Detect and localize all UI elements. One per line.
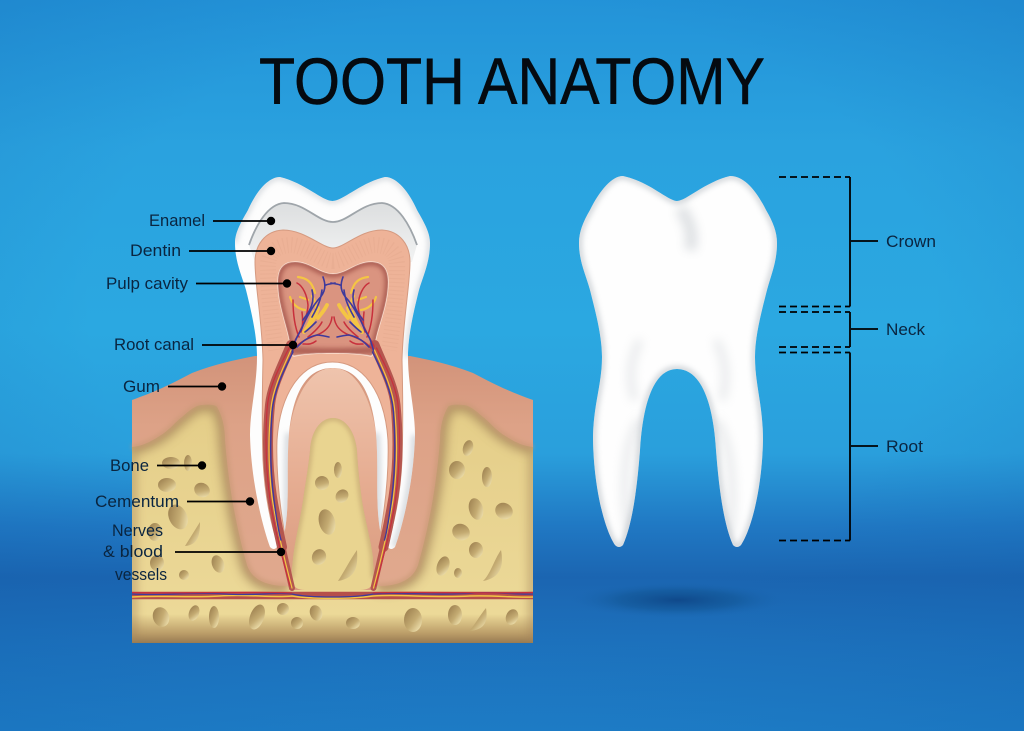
zone bracket: crown: [779, 177, 936, 306]
label: Root canal: Root canal: [114, 335, 194, 354]
zone bracket: root: [779, 352, 923, 540]
zone bracket: root: Root: [886, 437, 923, 456]
title: TOOTH ANATOMY: [259, 44, 765, 118]
label: Gum: [123, 377, 226, 396]
bone block: [132, 402, 533, 643]
floor shadow: [570, 582, 786, 618]
label: Nerves & blood vessels: & blood: [103, 542, 163, 561]
zone bracket: neck: [779, 312, 926, 347]
gum arch: [284, 368, 381, 590]
label: Cementum: Cementum: [95, 492, 179, 511]
whole tooth illustration: [579, 176, 777, 547]
blood vessel band: [132, 592, 533, 598]
label: Pulp cavity: [106, 274, 291, 293]
panel: tooth cross-section diagram: [95, 177, 533, 643]
label: Nerves & blood vessels: Nerves: [112, 521, 163, 540]
label: Bone: [110, 456, 206, 475]
tooth: white enamel and cementum: [235, 177, 430, 549]
pulp cavity: [278, 262, 388, 356]
label: Dentin: Dentin: [130, 241, 181, 260]
bone pores: [148, 439, 520, 632]
label: Cementum: [95, 492, 254, 511]
enamel inner layer: [249, 203, 417, 262]
label: Root canal: [114, 335, 297, 354]
labels and leaders: [95, 211, 297, 584]
label: Pulp cavity: Pulp cavity: [106, 274, 188, 293]
zone bracket: neck: Neck: [886, 320, 926, 339]
label: Nerves & blood vessels: vessels: [115, 565, 167, 584]
label: Dentin: [130, 241, 275, 260]
dentin: [255, 230, 410, 553]
central bone: [291, 418, 374, 590]
label: Gum: Gum: [123, 377, 160, 396]
label: Enamel: Enamel: [149, 211, 205, 230]
label: Nerves & blood vessels: [103, 521, 285, 584]
panel: whole tooth with zones: [570, 176, 936, 618]
nerves and blood vessels: [266, 277, 400, 588]
label: Bone: Bone: [110, 456, 149, 475]
zone bracket: crown: Crown: [886, 232, 936, 251]
gum: [132, 356, 533, 590]
label: Enamel: [149, 211, 275, 230]
